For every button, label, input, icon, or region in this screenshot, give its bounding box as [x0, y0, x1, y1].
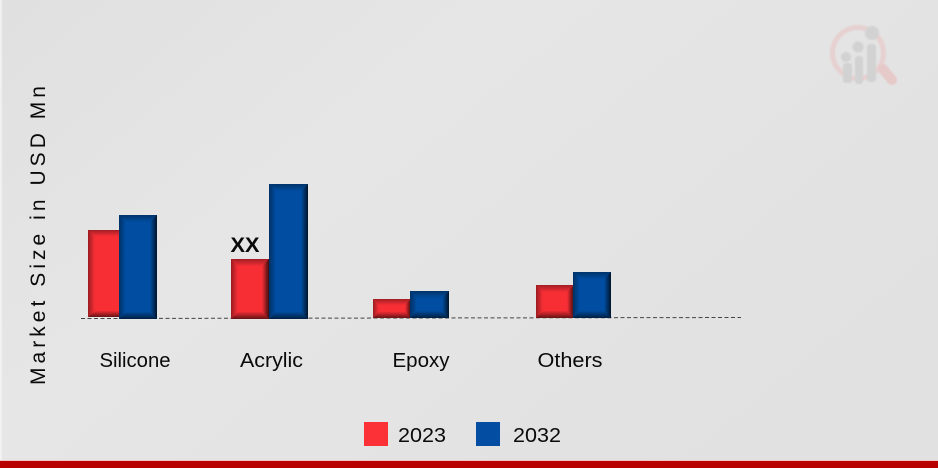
legend swatch 2032: [476, 422, 500, 446]
bar: Epoxy 2023: [373, 299, 411, 318]
category label: Others: Others: [538, 350, 602, 372]
bar: Others 2032: [573, 272, 611, 318]
category label: Epoxy: Epoxy: [392, 350, 450, 372]
legend: [364, 422, 561, 447]
bar: Epoxy 2032: [410, 291, 449, 318]
bar: Silicone 2032: [119, 215, 157, 319]
bar: Others 2023: [536, 285, 574, 318]
baseline: [81, 318, 741, 319]
y axis title: Market Size in USD Mn: [27, 86, 50, 385]
bars: Acrylic: [231, 184, 308, 319]
bars: Others: [536, 272, 611, 318]
footer bar: [0, 461, 938, 468]
bar: Silicone 2023: [88, 230, 120, 317]
legend swatch 2023: [364, 422, 388, 446]
bar: Acrylic 2032: [269, 184, 308, 319]
category label: Silicone: Silicone: [100, 350, 170, 372]
category label: Acrylic: Acrylic: [240, 350, 303, 372]
watermark logo icon: [832, 26, 892, 84]
bars: Silicone: [88, 215, 157, 319]
bar: Acrylic 2023: [231, 259, 269, 319]
legend label 2032: 2032: [513, 424, 561, 447]
legend label 2023: 2023: [398, 424, 446, 447]
value label: XX: [230, 234, 260, 257]
bars: Epoxy: [373, 291, 449, 318]
